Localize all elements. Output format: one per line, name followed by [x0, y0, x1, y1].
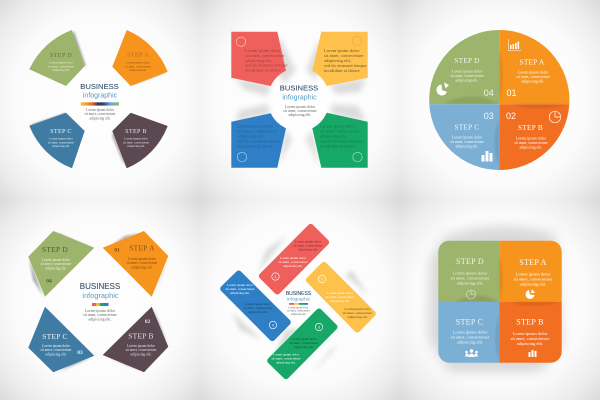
card: yellow: Lorem ipsum dolor	[344, 307, 371, 311]
card: green: sit amet, consectetuer	[289, 341, 320, 346]
icon: clock	[466, 290, 476, 299]
quadrant: step B: Lorem ipsum dolor	[516, 136, 547, 140]
quadrant: step B: sit amet, consectetuer	[511, 336, 550, 342]
quadrant: step B: STEP B	[516, 318, 544, 326]
card: green: Lorem ipsum dolor	[291, 337, 318, 341]
tab: yellow: Lorem ipsum dolor	[324, 48, 360, 53]
card: blue: sit amet, consectetuer	[225, 287, 256, 292]
tab: blue: sed do eiusmod tempor	[238, 138, 281, 144]
quadrant: step C: adipiscing elit.	[456, 144, 478, 148]
quadrant: step C: STEP C	[455, 124, 479, 132]
pentagon: step C: 03	[77, 350, 83, 356]
pentagon: step C: adipiscing elit.	[45, 352, 67, 356]
petal: step D: Lorem ipsum dolor	[49, 60, 73, 64]
quadrant: step D: adipiscing elit.	[456, 78, 478, 82]
quadrant: step B	[499, 302, 562, 363]
panel: rotated cards	[223, 227, 373, 376]
pentagon: step C	[28, 307, 94, 372]
pentagon: step B: Lorem ipsum dolor	[127, 344, 156, 348]
petal: step C	[29, 113, 85, 168]
card: green: sit amet, consectetuer	[271, 356, 302, 362]
card: blue	[223, 274, 288, 338]
pentagon: step D: Lorem ipsum dolor	[42, 258, 71, 262]
quadrant: step A: adipiscing elit.	[520, 282, 546, 286]
petal: step B: STEP B	[125, 128, 147, 135]
center title	[80, 282, 120, 321]
card: blue: adipiscing elit.	[230, 291, 250, 295]
tab: yellow: sit amet, consectetuer	[324, 53, 364, 59]
center title: infographic	[83, 92, 118, 100]
quadrant: step B: adipiscing elit.	[517, 341, 543, 346]
icon: pie	[526, 289, 535, 299]
tab: red: incididunt at labore	[245, 68, 281, 73]
petal: step D: sit amet, consectetuer	[48, 64, 74, 69]
card: red	[262, 227, 326, 292]
quadrant: step B	[499, 104, 569, 170]
shadows: cards	[232, 236, 368, 375]
petal: step A: sit amet, consectetuer	[125, 64, 151, 69]
center title: BUSINESS	[286, 291, 312, 297]
panel: circle chart	[429, 30, 569, 170]
quadrant: step D: STEP D	[456, 257, 484, 266]
quadrant: step A	[499, 30, 569, 104]
quadrant: step C: STEP C	[456, 318, 483, 326]
panel: pentagon petals	[28, 231, 168, 372]
quadrant: step D: 04	[484, 88, 494, 98]
tab: blue	[231, 113, 286, 168]
petal: step D: STEP D	[50, 52, 72, 59]
card: yellow: adipiscing elit.	[348, 315, 368, 319]
card: red: Lorem ipsum dolor	[295, 240, 322, 244]
petal: step C: Lorem ipsum dolor	[49, 136, 73, 140]
quadrant: step D: Lorem ipsum dolor	[453, 270, 488, 276]
icon: clock	[549, 111, 561, 123]
quadrant: step A: STEP A	[519, 258, 547, 267]
icon: people	[465, 349, 478, 357]
tab: green	[312, 113, 368, 168]
petal: step D: adipiscing elit.	[52, 68, 70, 72]
card: red: sit amet, consectetuer	[293, 244, 324, 248]
center title: infographic	[282, 94, 317, 102]
quadrant: step D: sit amet, consectetuer	[450, 74, 484, 79]
card: yellow: 2	[321, 278, 323, 282]
quadrant: step B: adipiscing elit.	[520, 145, 542, 149]
tab: red: adipiscing elit,	[245, 58, 272, 64]
petal: step A: adipiscing elit.	[129, 68, 147, 72]
pentagon: step A: STEP A	[129, 244, 155, 252]
tab: blue: Lorem ipsum dolor	[238, 124, 273, 128]
center title: BUSINESS	[280, 84, 318, 92]
quadrant: step A: Lorem ipsum dolor	[516, 272, 551, 276]
card: red: 1	[275, 275, 277, 279]
center title	[80, 82, 119, 120]
card: yellow: Lorem ipsum dolor	[327, 291, 354, 295]
petal: step C: STEP C	[50, 128, 72, 135]
center title: sit amet, consectetuer	[84, 112, 116, 117]
petal: step C: sit amet, consectetuer	[48, 140, 74, 145]
pentagon: step A	[103, 231, 168, 297]
pentagon: step D: STEP D	[42, 245, 68, 254]
card: blue: adipiscing elit.	[248, 310, 268, 314]
icon: bars	[528, 350, 536, 357]
quadrant: step C: adipiscing elit.	[457, 340, 483, 344]
card: yellow: sit amet, consectetuer	[325, 295, 356, 300]
icon: pie	[436, 82, 449, 95]
tab: red: sit amet, consectetuer	[245, 53, 285, 59]
tab: green: incididunt at labore	[320, 144, 356, 148]
card: red: sit amet, consectetuer	[278, 260, 309, 265]
quadrant: step D: STEP D	[454, 57, 480, 65]
center title: adipiscing elit.	[89, 317, 111, 321]
pentagon: step A: adipiscing elit.	[131, 265, 153, 269]
tab: yellow: adipiscing elit,	[324, 58, 351, 64]
quadrant: step B: Lorem ipsum dolor	[513, 331, 548, 336]
tab: yellow: sed do eiusmod tempor	[324, 63, 367, 68]
tab: red	[231, 32, 288, 86]
quadrant: step A: 01	[506, 88, 517, 98]
center title: sit amet, consectetuer	[287, 310, 310, 313]
center title: infographic	[287, 296, 311, 302]
card: yellow	[309, 265, 373, 330]
tab: blue: adipiscing elit,	[238, 134, 265, 140]
petal: step B: adipiscing elit.	[127, 144, 145, 148]
quadrant: step A: STEP A	[520, 58, 545, 66]
card: blue: Lorem ipsum dolor	[227, 283, 254, 287]
center title: adipiscing elit.	[291, 313, 306, 316]
card: yellow: adipiscing elit.	[330, 299, 350, 303]
center title: sit amet, consectetuer	[283, 109, 317, 114]
pentagon: step B: 02	[145, 319, 150, 325]
petal: step A	[112, 30, 168, 86]
petal: step D	[29, 30, 85, 86]
center title: sit amet, consectetuer	[83, 313, 117, 318]
pentagon: step D: 04	[46, 278, 52, 284]
quadrant: step D: Lorem ipsum dolor	[452, 70, 483, 74]
quadrant: step C: sit amet, consectetuer	[450, 140, 484, 145]
quadrant: step B: 02	[506, 111, 516, 121]
pentagon: step D	[28, 231, 94, 297]
card: blue: Lorem ipsum dolor	[245, 302, 272, 306]
pentagon: step B	[103, 307, 168, 372]
tab: green: sed do eiusmod tempor	[320, 138, 363, 144]
center title: BUSINESS	[80, 282, 120, 291]
card: green	[270, 312, 334, 376]
pentagon: step C: Lorem ipsum dolor	[42, 344, 71, 348]
tab: green: Lorem ipsum dolor	[320, 124, 356, 128]
quadrant: step D	[438, 240, 499, 302]
petal: step A: STEP A	[127, 52, 149, 58]
card: red: adipiscing elit.	[283, 264, 303, 268]
tab: yellow	[312, 32, 368, 86]
pentagon: step A: sit amet, consectetuer	[126, 261, 158, 266]
tab: red: Lorem ipsum dolor	[245, 48, 281, 53]
panel: rounded square	[428, 226, 562, 372]
card: blue: 4	[272, 324, 274, 328]
pentagon: step C: STEP C	[42, 332, 68, 341]
quadrant: step D: sit amet, consectetuer	[451, 276, 490, 282]
center title: BUSINESS	[80, 82, 119, 91]
quadrant: step D	[429, 30, 499, 104]
icon: bar chart	[508, 39, 521, 50]
center title	[280, 84, 318, 117]
pentagon: step A: Lorem ipsum dolor	[128, 257, 157, 261]
petal: step B: sit amet, consectetuer	[123, 140, 149, 145]
petal: step A: Lorem ipsum dolor	[126, 60, 150, 64]
petal: step B	[112, 113, 168, 168]
pentagon: step B: adipiscing elit.	[130, 352, 152, 356]
tab: green: adipiscing elit,	[320, 134, 347, 140]
tab: blue: sit amet, consectetuer	[238, 128, 278, 134]
square quadrants	[438, 240, 562, 363]
quadrant: step A: adipiscing elit.	[522, 79, 544, 83]
petal: step B: Lorem ipsum dolor	[124, 136, 148, 140]
quadrant: step B: STEP B	[518, 124, 543, 132]
quadrant: step A: sit amet, consectetuer	[516, 75, 550, 80]
quadrant: step D: adipiscing elit.	[457, 280, 483, 286]
quadrant: step B: sit amet, consectetuer	[514, 141, 548, 146]
quadrant: step A: sit amet, consectetuer	[514, 276, 553, 282]
center title: Lorem ipsum dolor	[285, 105, 316, 109]
center title: adipiscing elit.	[289, 113, 311, 117]
center title: Lorem ipsum dolor	[288, 306, 309, 310]
petal: step C: adipiscing elit.	[52, 144, 70, 148]
center title: infographic	[82, 291, 119, 300]
card: red: Lorem ipsum dolor	[280, 256, 307, 260]
shadows: petals	[30, 31, 167, 167]
card: red: adipiscing elit.	[298, 248, 318, 252]
quadrant: step A: Lorem ipsum dolor	[518, 70, 549, 74]
tab: green: sit amet, consectetuer	[320, 128, 360, 134]
quadrant: step C: Lorem ipsum dolor	[452, 136, 483, 140]
quadrant: step C	[438, 302, 499, 363]
card: yellow: sit amet, consectetuer	[343, 311, 373, 316]
center title: Lorem ipsum dolor	[86, 108, 115, 112]
panel: square tabs with circle cutout	[231, 32, 368, 168]
tab: blue: incididunt at labore	[238, 144, 273, 148]
quadrant: step C: 03	[484, 111, 494, 121]
center title	[286, 291, 312, 316]
tab: red: sed do eiusmod tempor	[245, 63, 288, 68]
card: blue: sit amet, consectetuer	[243, 306, 274, 311]
quadrant: step C: Lorem ipsum dolor	[453, 330, 488, 334]
card: green: adipiscing elit.	[294, 345, 314, 349]
quadrant: step A	[499, 240, 562, 302]
pentagon: step D: adipiscing elit.	[45, 266, 67, 270]
center title: Lorem ipsum dolor	[85, 309, 116, 313]
shadow: square	[428, 226, 562, 372]
shadows: pentagons	[29, 232, 168, 372]
card: green: Lorem ipsum dolor	[273, 352, 300, 356]
pentagon: step D: sit amet, consectetuer	[40, 262, 72, 267]
pentagon: step A: 01	[114, 248, 120, 254]
icon: bars	[482, 151, 492, 162]
quadrant: step C: sit amet, consectetuer	[451, 334, 490, 340]
tab: yellow: incididunt at labore	[324, 68, 360, 73]
panel: curved petals	[29, 30, 168, 168]
pentagon: step B: sit amet, consectetuer	[125, 348, 157, 353]
shadows: tabs	[235, 36, 366, 166]
card: green: 3	[318, 326, 320, 330]
center title: adipiscing elit.	[89, 116, 111, 120]
pentagon: step C: sit amet, consectetuer	[40, 348, 72, 353]
card: green: adipiscing elit.	[276, 360, 296, 364]
quadrant: step C	[429, 104, 499, 170]
pentagon: step B: STEP B	[128, 332, 154, 340]
